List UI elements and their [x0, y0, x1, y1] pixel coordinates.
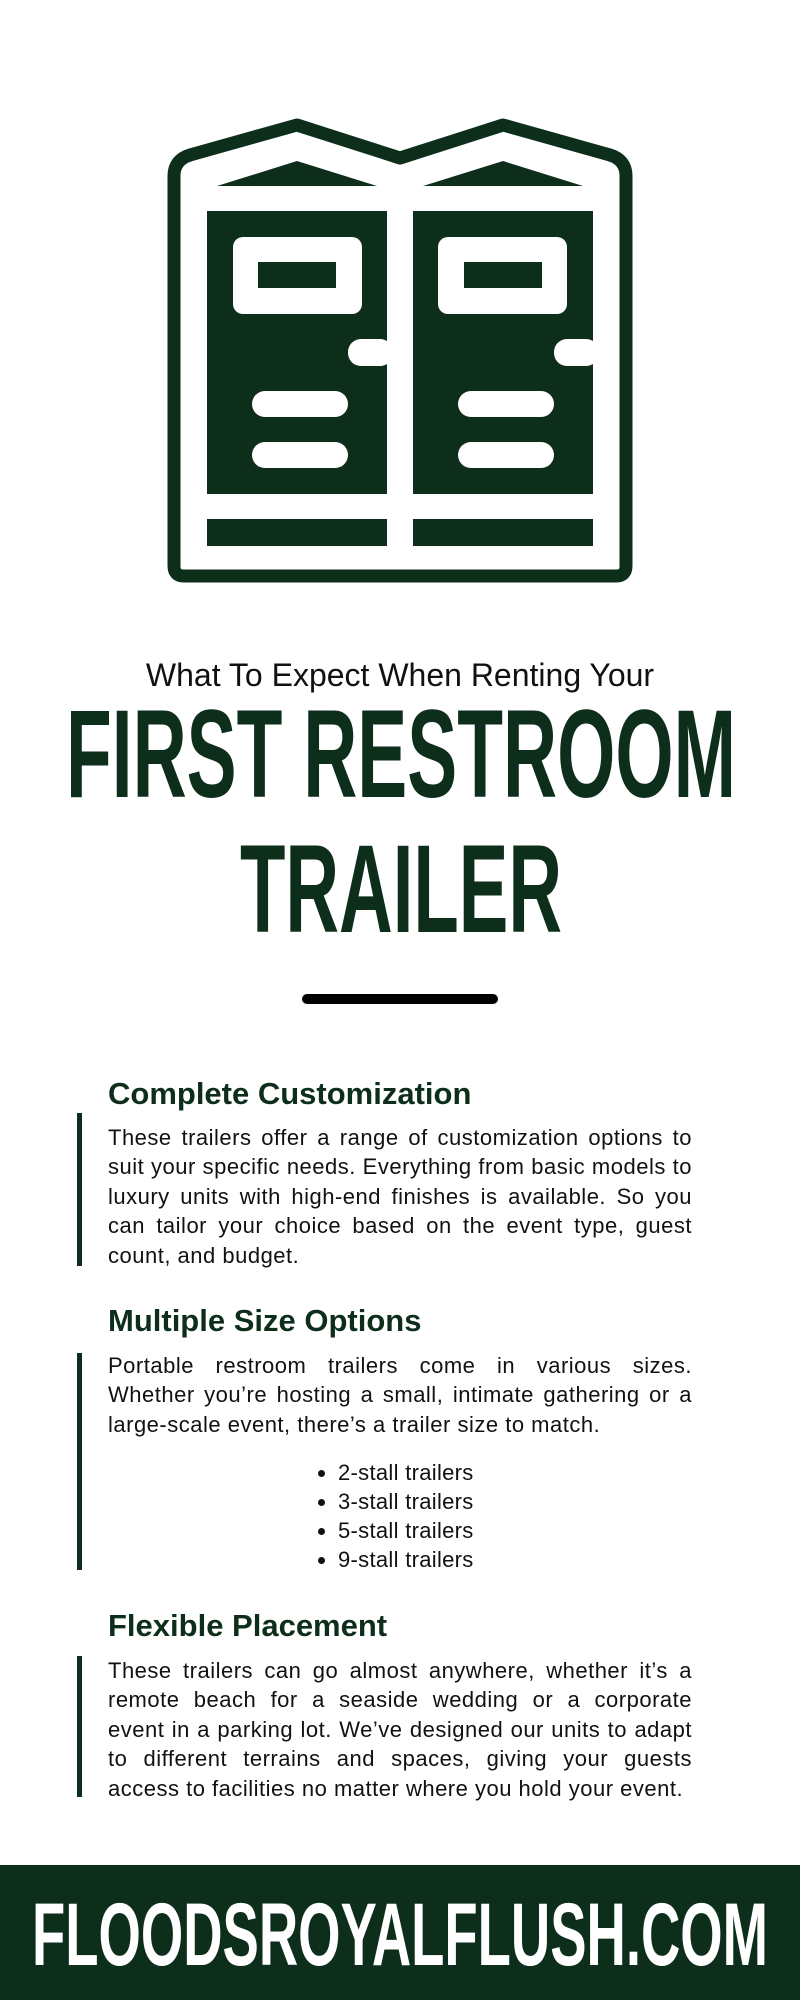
heading: Complete Customization	[108, 1076, 471, 1111]
icon: restroom trailer	[168, 118, 632, 582]
bullet list: 2-stall trailers	[338, 1460, 474, 1485]
bullet list: 9-stall trailers	[338, 1547, 474, 1572]
accent bar	[77, 1113, 82, 1266]
divider	[302, 994, 498, 1004]
section: multiple size options	[77, 1303, 692, 1572]
footer	[0, 1865, 800, 2000]
section: flexible placement	[77, 1608, 692, 1801]
title	[66, 690, 736, 950]
body text: These trailers offer a range of customization options to suit your specific needs. Everything from basic models to luxury units with high-end finishes is available. So you can tailor your choice based on the event type, guest count, and budget.	[108, 1125, 692, 1268]
accent bar	[77, 1656, 82, 1797]
subtitle: What To Expect When Renting Your	[146, 657, 654, 693]
bullet list: 5-stall trailers	[338, 1518, 474, 1543]
accent bar	[77, 1353, 82, 1570]
body text: These trailers can go almost anywhere, whether it’s a remote beach for a seaside wedding or a corporate event in a parking lot. We’ve designed our units to adapt to different terrains and spaces, giving your guests access to facilities no matter where you hold your event.	[108, 1658, 692, 1801]
heading: Multiple Size Options	[108, 1303, 421, 1338]
body text: Portable restroom trailers come in various sizes. Whether you’re hosting a small, intimate gathering or a large-scale event, there’s a trailer size to match.	[108, 1353, 692, 1437]
section: complete customization	[77, 1076, 692, 1268]
heading: Flexible Placement	[108, 1608, 387, 1643]
bullet list: 3-stall trailers	[338, 1489, 474, 1514]
bullet list	[318, 1460, 474, 1572]
